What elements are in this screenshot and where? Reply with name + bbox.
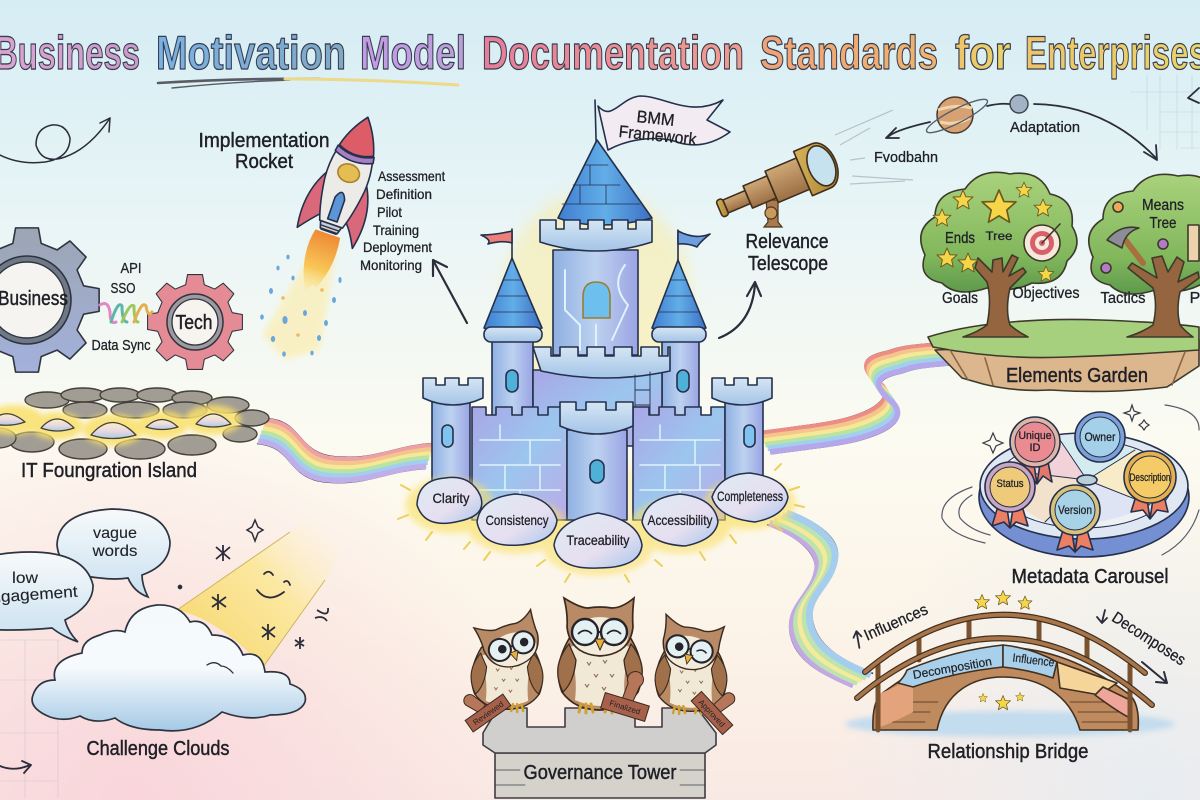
heading: Relevance Telescope: [746, 231, 828, 275]
stamp: left: [453, 677, 511, 732]
stamp: left: Reviewed: [471, 700, 505, 727]
label: Decomposes: Decomposes: [1109, 609, 1188, 669]
island glow: [0, 405, 241, 446]
stone: Completeness: Completeness: [717, 488, 783, 504]
metadata carousel: [942, 405, 1199, 557]
speech bubble: low engagement: [0, 552, 93, 642]
beam sparkles: [212, 545, 328, 649]
bridge sparkles: [974, 590, 1032, 710]
labels: garden: Elements Garden: [1006, 365, 1148, 387]
badge: Owner: Owner: [1084, 430, 1116, 444]
badge: Unique ID: [1010, 417, 1060, 484]
arrow: castle to rocket: [433, 260, 467, 323]
gear: Business: [0, 228, 99, 372]
bridge deck: [873, 648, 1138, 730]
heading: IT Foundation Island: IT Foungration Island: [21, 460, 197, 482]
badge: Version: [1050, 485, 1100, 552]
heading: Implementation Rocket: [198, 130, 330, 173]
puzzle planks: Decomposition: [912, 654, 993, 682]
stone: Traceability: [554, 513, 642, 568]
IT foundation island: [0, 388, 269, 459]
stamp: middle: Finalized: [608, 698, 641, 716]
stone: Consistency: Consistency: [486, 512, 548, 528]
heading: Relationship Bridge: Relationship Bridge: [928, 741, 1088, 763]
stone: Accessibility: [642, 494, 718, 546]
castle glow: [407, 190, 787, 543]
owl: left: [471, 610, 546, 712]
stamp: middle: [601, 665, 658, 721]
challenge cloud: [32, 605, 305, 731]
left turret: [481, 229, 542, 440]
bridge railing: [857, 615, 1152, 730]
stone: Traceability: Traceability: [566, 532, 630, 548]
title underline: [158, 79, 458, 88]
label: Feedback loop: Fvodbahn: [874, 149, 938, 166]
stone: Completeness: [712, 473, 788, 522]
puzzle planks: [877, 645, 1130, 728]
heading: Metadata Carousel: Metadata Carousel: [1012, 566, 1168, 588]
label: Influences: Influences: [862, 601, 931, 644]
quality stones: [398, 464, 804, 582]
title: Business: [0, 26, 140, 79]
labels: garden: Tree: [986, 229, 1013, 243]
title: [0, 26, 1200, 79]
label: Adaptation: Adaptation: [1010, 119, 1080, 136]
adaptation orbit: planet and moon: [886, 94, 1157, 160]
rocket exhaust rays: [262, 235, 338, 360]
labels: integration: Data Sync: [92, 337, 151, 354]
labels: garden: Tactics: [1100, 290, 1146, 307]
carousel disc: [979, 433, 1189, 557]
carousel sparkles: [983, 405, 1149, 453]
heading: Challenge Clouds: Challenge Clouds: [86, 738, 230, 760]
stone: Clarity: [417, 477, 482, 523]
heading: Relevance Telescope: Telescope: [748, 253, 828, 275]
ends tree: [921, 172, 1077, 337]
title: Motivation: [156, 26, 346, 79]
rocket flame: [293, 229, 341, 297]
right wall: [633, 407, 725, 520]
gear: Business: Business: [0, 288, 68, 310]
badge: Unique ID: Unique: [1018, 430, 1052, 442]
rocket sparks: [260, 255, 342, 357]
heading: Relevance Telescope: Relevance: [746, 231, 828, 253]
island: [928, 319, 1199, 391]
speed lines: [835, 110, 913, 184]
rainbow path: left: [257, 418, 435, 483]
carousel swirls: [942, 405, 1199, 555]
right outer tower: [712, 378, 772, 482]
labels: garden: Objectives: [1012, 285, 1080, 302]
front tower: [560, 402, 633, 520]
labels: garden: [942, 197, 1200, 387]
sparkles around beam: [178, 520, 263, 589]
governance tower: [483, 708, 716, 798]
gears: business and tech: [0, 228, 242, 372]
badge: Description: Description: [1130, 472, 1170, 484]
labels: integration: [92, 260, 151, 354]
owl: middle: [558, 598, 642, 713]
rocket steps list: [360, 168, 445, 273]
badge: Owner: [1075, 412, 1125, 462]
labels: integration: API: [120, 260, 142, 277]
stone: Clarity: Clarity: [432, 490, 470, 506]
beam face: [257, 572, 290, 598]
badge: Status: [985, 462, 1035, 528]
heading: Implementation Rocket: Rocket: [235, 151, 293, 173]
arrow: decomposes: [1142, 662, 1167, 683]
spring connector: [100, 304, 152, 323]
speech bubble: vague words: vague: [93, 525, 137, 542]
elements garden: [921, 172, 1200, 391]
badge: Description: [1124, 451, 1176, 519]
badge: Version: Version: [1058, 503, 1092, 517]
stone glow: [406, 477, 796, 576]
stone: Accessibility: Accessibility: [648, 512, 712, 528]
heading: Implementation Rocket: Implementation: [198, 130, 330, 152]
title: for: [955, 26, 1011, 79]
stone rays: [398, 464, 804, 582]
decorative loop arrow: [0, 118, 110, 163]
stone: Consistency: [477, 494, 557, 545]
rainbow path: lower: [767, 512, 873, 686]
label: Governance Tower: Governance Tower: [524, 762, 677, 784]
light beam: [177, 517, 342, 667]
labels: garden: Means: [1142, 197, 1184, 214]
rocket: [277, 107, 397, 302]
flag: BMM Framework: BMM: [636, 107, 675, 130]
means tree: [1089, 174, 1200, 337]
castle: BMM framework: [423, 96, 772, 520]
speech bubble: vague words: words: [91, 543, 138, 560]
rocket steps list: Assessment: [378, 168, 445, 184]
glowing domes: [0, 414, 231, 438]
rocket steps list: Deployment: [363, 239, 432, 255]
middle drum: [533, 347, 670, 446]
right turret: [652, 230, 710, 440]
decorative lower-left arrow: [0, 761, 31, 773]
rocket steps list: Monitoring: [360, 257, 422, 273]
gear: Tech: [148, 275, 242, 369]
speech bubble: vague words: [57, 509, 170, 597]
labels: garden: Tree: [1150, 215, 1177, 232]
title: Documentation: [482, 26, 744, 79]
telescope: [710, 138, 845, 231]
stamp: right: [691, 677, 748, 735]
flag: BMM Framework: Framework: [618, 122, 698, 149]
labels: garden: Goals: [942, 290, 978, 307]
rocket steps list: Pilot: [377, 204, 402, 220]
relationship bridge: [845, 590, 1175, 737]
title: Standards: [760, 26, 938, 79]
stamp: right: Approved: [697, 698, 727, 729]
rocket steps list: Training: [373, 222, 419, 238]
puzzle planks: Influence: [1012, 651, 1055, 670]
labels: garden: Ends: [945, 230, 975, 247]
gear: Tech: Tech: [176, 312, 212, 334]
central tower: [540, 140, 652, 355]
badge: Status: Status: [996, 478, 1024, 490]
left outer tower: [423, 378, 483, 482]
owls: [453, 598, 748, 735]
title: Model: [360, 26, 466, 79]
speech bubble: low engagement: low: [12, 570, 38, 587]
rainbow path: right: [757, 343, 949, 454]
top right corner arrow: [1188, 88, 1199, 103]
owl: right: [655, 614, 727, 714]
badge: Unique ID: ID: [1030, 442, 1041, 454]
arrow: castle to telescope: [719, 282, 761, 338]
rainbow paths: [257, 343, 949, 686]
flag: BMM Framework: [595, 96, 730, 175]
rocket steps list: Definition: [376, 186, 432, 202]
water: [845, 711, 1175, 737]
left wall: [472, 407, 567, 520]
labels: integration: SSO: [110, 280, 136, 297]
